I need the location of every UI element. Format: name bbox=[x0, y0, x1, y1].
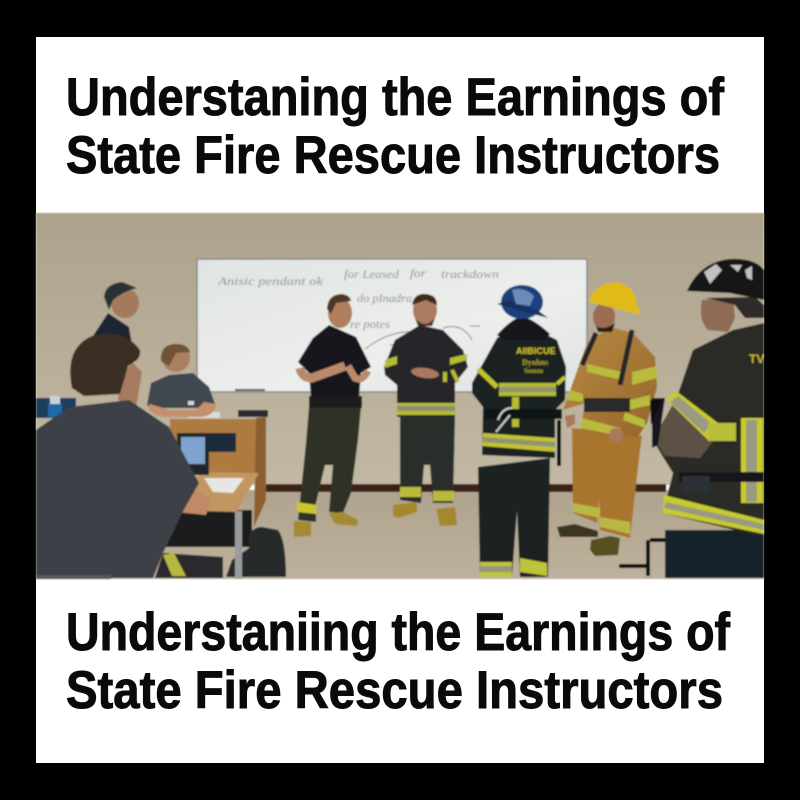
student desk bbox=[159, 472, 259, 579]
bottom title bbox=[66, 603, 730, 720]
firefighter in tan gear with yellow helmet bbox=[557, 282, 657, 556]
firefighter with blue helmet: AIIBICUE bbox=[516, 346, 556, 356]
whiteboard: trackdown bbox=[441, 267, 499, 281]
laptop bbox=[177, 433, 209, 475]
firefighter with blue helmet: Dynhns bbox=[522, 358, 548, 367]
whiteboard: re potes bbox=[350, 317, 390, 331]
instructor in black polo bbox=[294, 294, 371, 537]
firefighter with blue helmet bbox=[472, 285, 566, 577]
foreground student from behind bbox=[36, 334, 223, 579]
whiteboard: Anisic pendant ok bbox=[217, 274, 324, 288]
whiteboard: for bbox=[410, 266, 426, 280]
firefighter with black helmet bbox=[650, 259, 764, 578]
top title bbox=[66, 68, 724, 185]
firefighter with blue helmet: Somm bbox=[524, 367, 543, 375]
classroom wall bbox=[36, 213, 764, 485]
photo: firefighter training classroom bbox=[36, 213, 764, 579]
instructor with cap bbox=[93, 282, 139, 345]
whiteboard: for Leased bbox=[344, 267, 400, 281]
wooden podium bbox=[170, 410, 268, 527]
whiteboard: do pInadra bbox=[357, 291, 412, 305]
black backpack bbox=[160, 510, 286, 577]
bottom title: State Fire Rescue Instructors bbox=[66, 661, 723, 720]
top title: Understaning the Earnings of bbox=[66, 68, 724, 127]
top title: State Fire Rescue Instructors bbox=[66, 126, 720, 185]
whiteboard bbox=[197, 259, 587, 392]
seated student bbox=[147, 344, 216, 417]
floor bbox=[36, 490, 764, 579]
office chair base bbox=[619, 540, 667, 576]
firefighter with black helmet: TV bbox=[749, 352, 764, 366]
instructor in turnout gear bbox=[384, 294, 468, 526]
blue supply bag bbox=[36, 396, 76, 418]
baseboard bbox=[266, 484, 666, 492]
